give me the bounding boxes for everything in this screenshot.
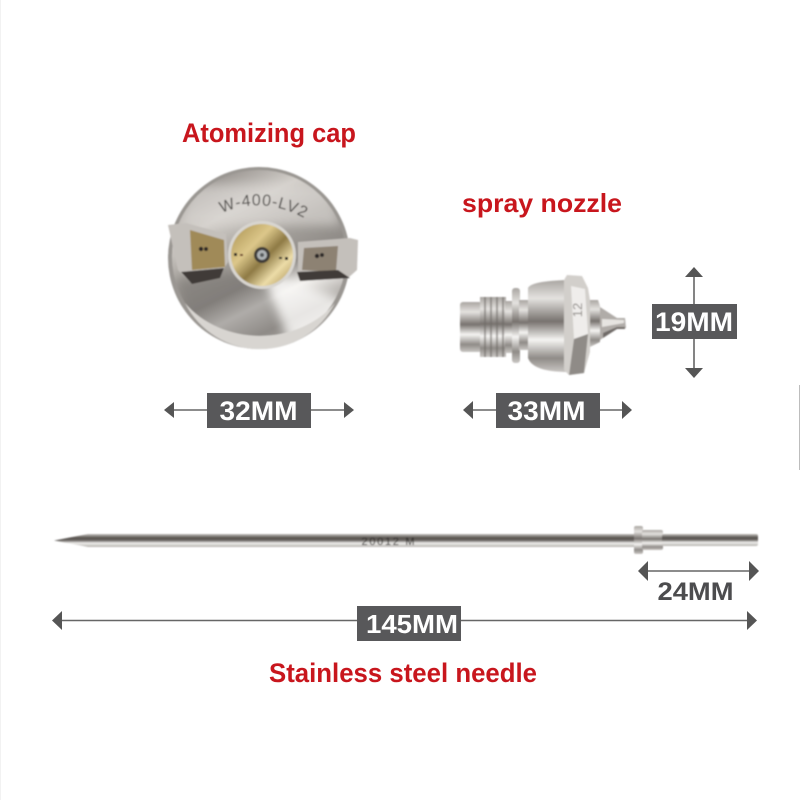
heading: Atomizing cap: Atomizing cap — [182, 118, 356, 148]
brass center — [228, 221, 296, 289]
dimension: 32MM — [164, 393, 354, 428]
dimension: 32MM: 32MM — [220, 396, 298, 426]
left horn — [168, 223, 228, 284]
engraved text: 20012 M: 20012 M — [362, 536, 414, 548]
heading: spray nozzle: spray nozzle — [462, 188, 622, 218]
spray nozzle photo — [460, 275, 626, 375]
engraved text: W-400-LV2: W-400-LV2 — [218, 193, 308, 218]
dimension: 24MM — [638, 561, 759, 606]
dimension: 145MM — [52, 606, 757, 641]
engraved number: 12 — [570, 303, 585, 317]
dimension: 24MM: 24MM — [658, 578, 734, 606]
dimension: 33MM — [463, 393, 632, 428]
dimension: 19MM — [652, 267, 737, 378]
caption: Stainless steel needle: Stainless steel needle — [269, 658, 537, 688]
stainless steel needle photo — [54, 526, 758, 554]
dimension: 33MM: 33MM — [508, 396, 586, 426]
right horn — [297, 238, 358, 281]
dimension: 145MM: 145MM — [366, 609, 458, 639]
atomizing cap photo — [167, 166, 359, 350]
dimension: 19MM: 19MM — [655, 307, 733, 337]
